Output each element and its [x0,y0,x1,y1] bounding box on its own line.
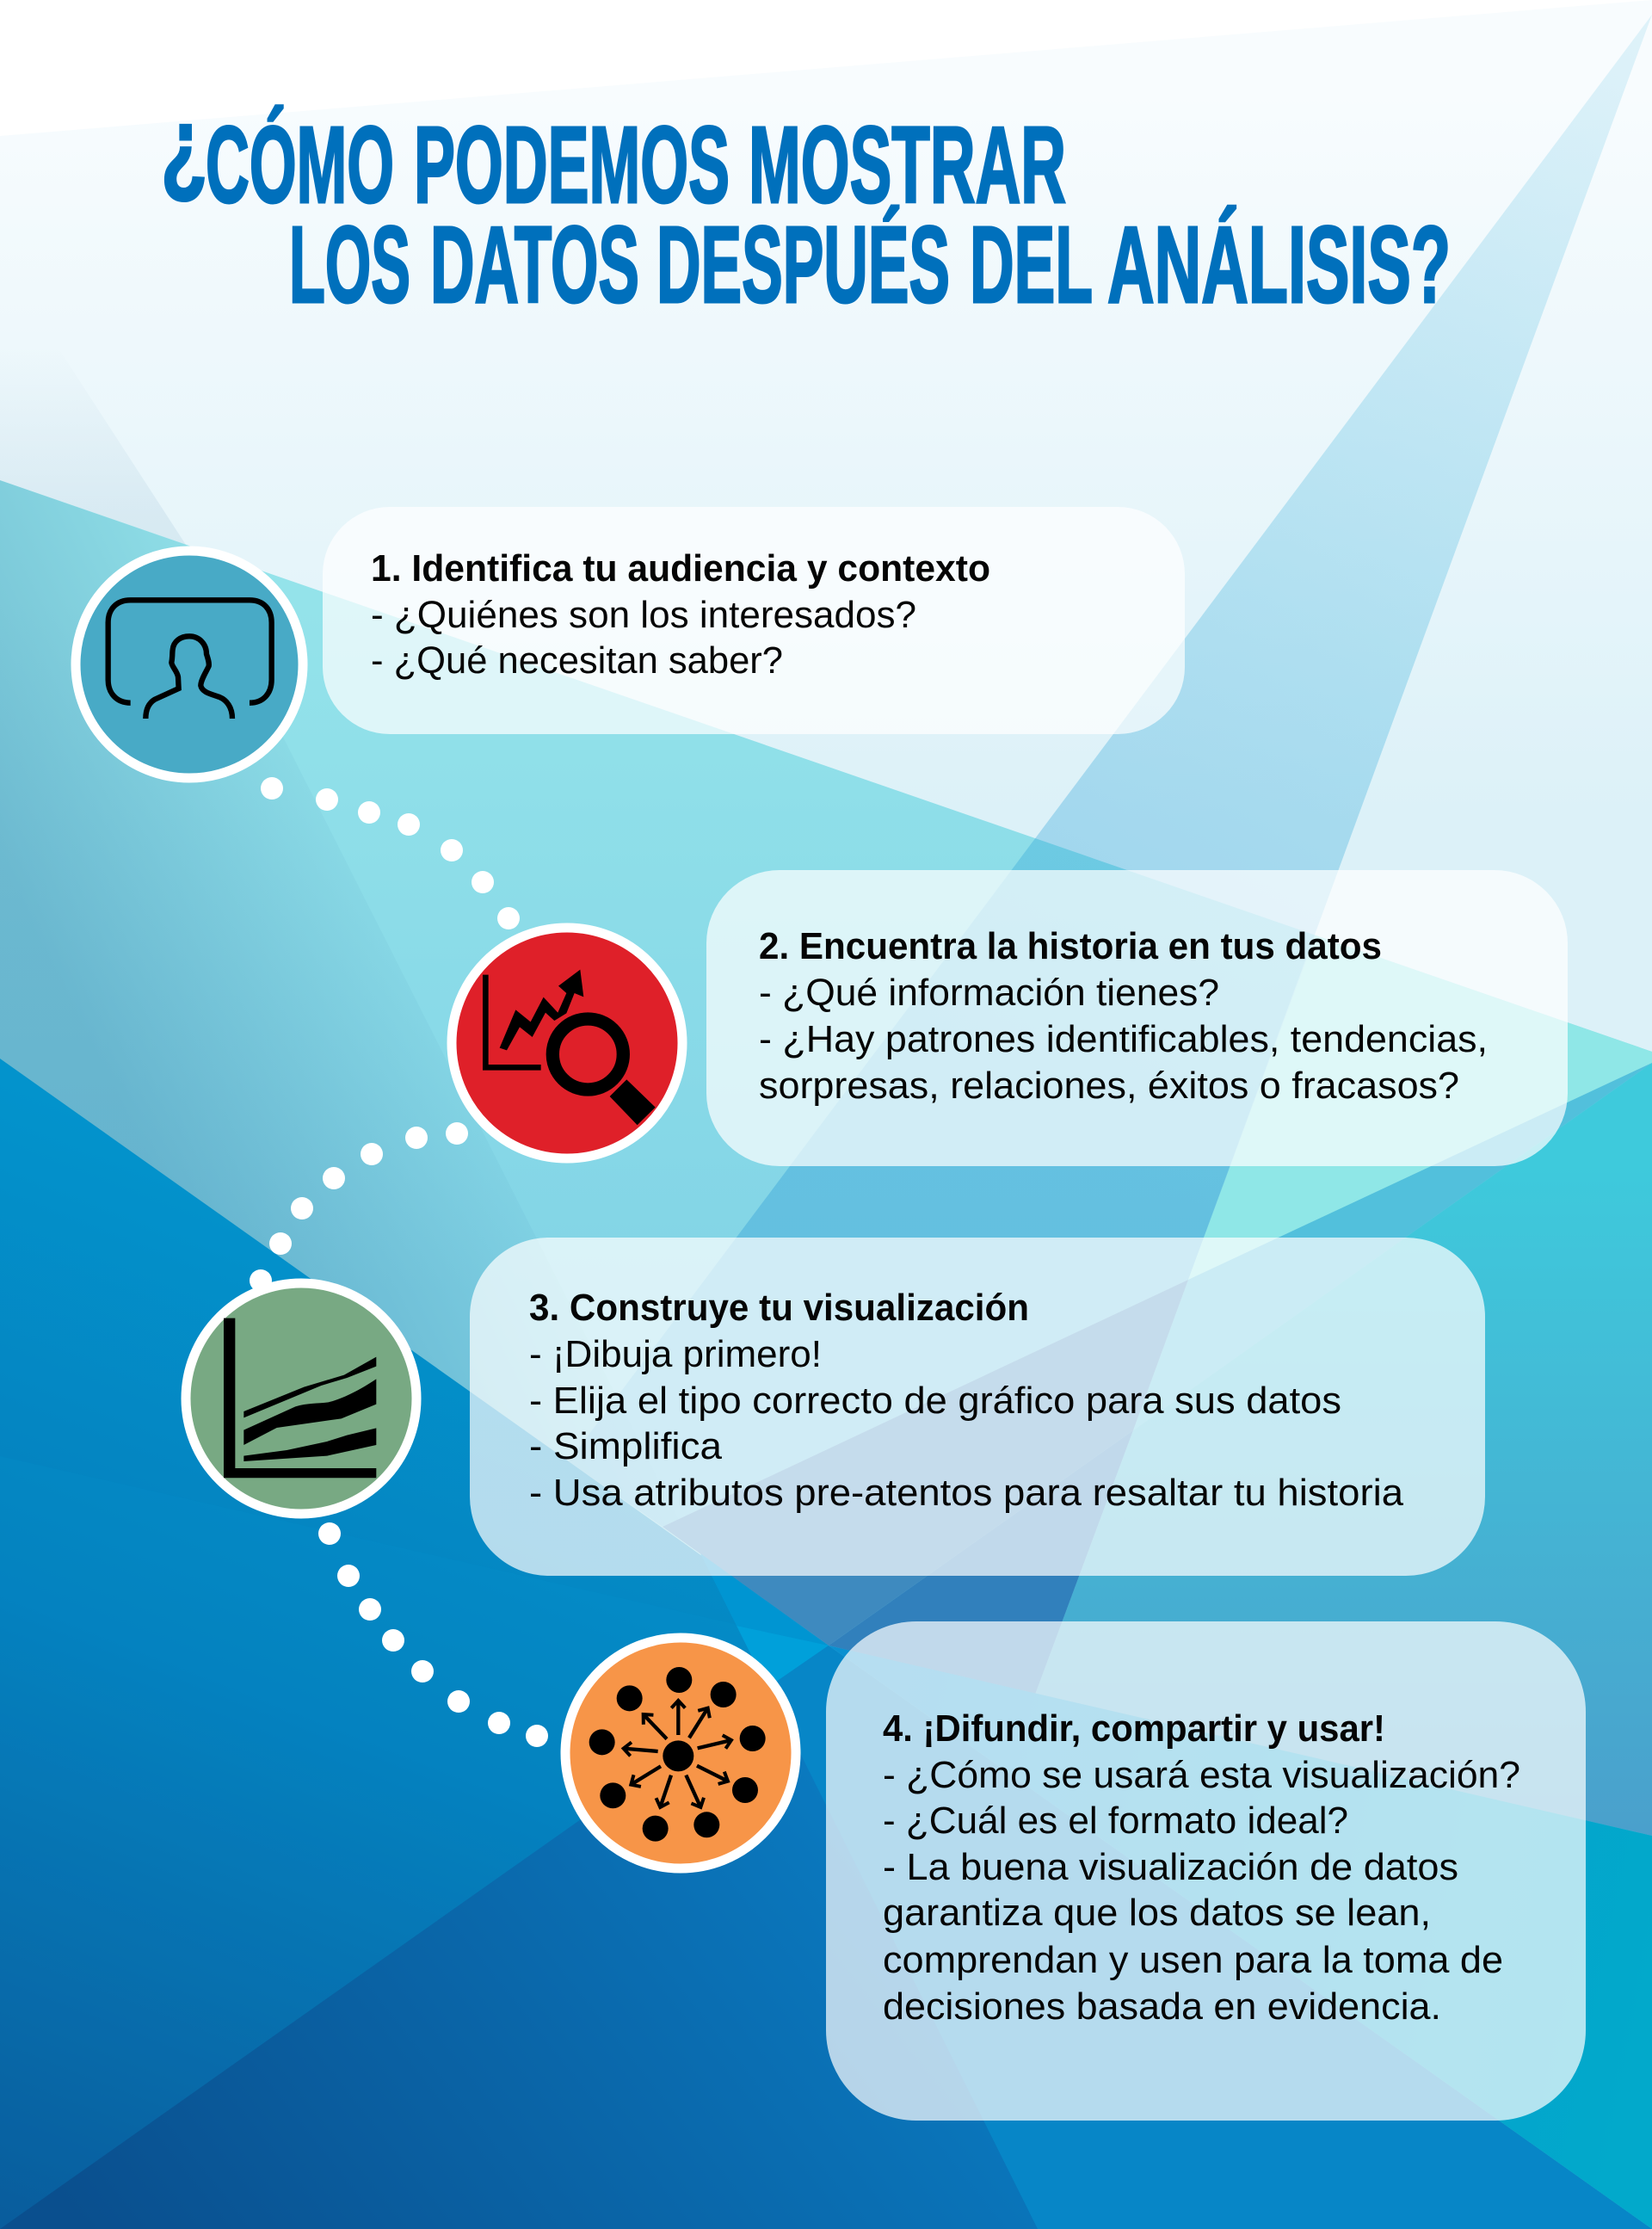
title: DESPUÉS [656,204,950,325]
title: ¿ [161,84,207,206]
panel: step 3: - Elija el tipo correcto de gráfico para sus datos [529,1380,1341,1422]
panel: step 2 [706,870,1568,1166]
title: MOSTRAR [749,104,1066,225]
icon: central node spreading to many nodes [565,1638,796,1868]
panel: step 2: - ¿Hay patrones identificables, tendencias, [759,1018,1488,1060]
panel: step 1 [323,507,1185,734]
panel: step 1: 1. Identifica tu audiencia y contexto [371,547,990,590]
title: LOS [289,204,410,325]
panel: step 1: - ¿Quiénes son los interesados? [371,594,916,636]
panel: step 4: - La buena visualización de datos [883,1846,1458,1888]
panel: step 4: comprendan y usen para la toma de [883,1939,1503,1981]
panel: step 4 [826,1621,1586,2121]
panel: step 2: 2. Encuentra la historia en tus datos [759,925,1382,967]
title: DATOS [430,204,639,325]
panel: step 1: - ¿Qué necesitan saber? [371,639,783,682]
panel: step 2: - ¿Qué información tienes? [759,972,1219,1014]
dotted connector: step 2 to step 3 [250,1122,468,1292]
title [161,84,1451,325]
title: PODEMOS [414,104,730,225]
panel: step 3 [470,1238,1485,1576]
panel: step 4: - ¿Cómo se usará esta visualización? [883,1754,1520,1796]
panel: step 3: - ¡Dibuja primero! [529,1333,822,1375]
dotted connector: step 1 to step 2 [261,777,520,929]
panel: step 2: sorpresas, relaciones, éxitos o fracasos? [759,1065,1459,1107]
icon: chart with magnifying glass [452,928,682,1158]
title: DEL [970,204,1093,325]
panel: step 4: 4. ¡Difundir, compartir y usar! [883,1707,1385,1750]
panel: step 3: - Usa atributos pre-atentos para resaltar tu historia [529,1472,1404,1514]
icon: stacked area line chart [186,1283,416,1514]
panel: step 3: 3. Construye tu visualización [529,1287,1029,1329]
dotted connector: step 3 to step 4 [318,1522,548,1747]
panel: step 4: - ¿Cuál es el formato ideal? [883,1800,1348,1842]
panel: step 4: garantiza que los datos se lean, [883,1892,1431,1934]
title: CÓMO [206,104,394,225]
panel: step 4: decisiones basada en evidencia. [883,1985,1441,2028]
icon: audience presenter on screen [76,551,303,778]
panel: step 3: - Simplifica [529,1425,723,1467]
